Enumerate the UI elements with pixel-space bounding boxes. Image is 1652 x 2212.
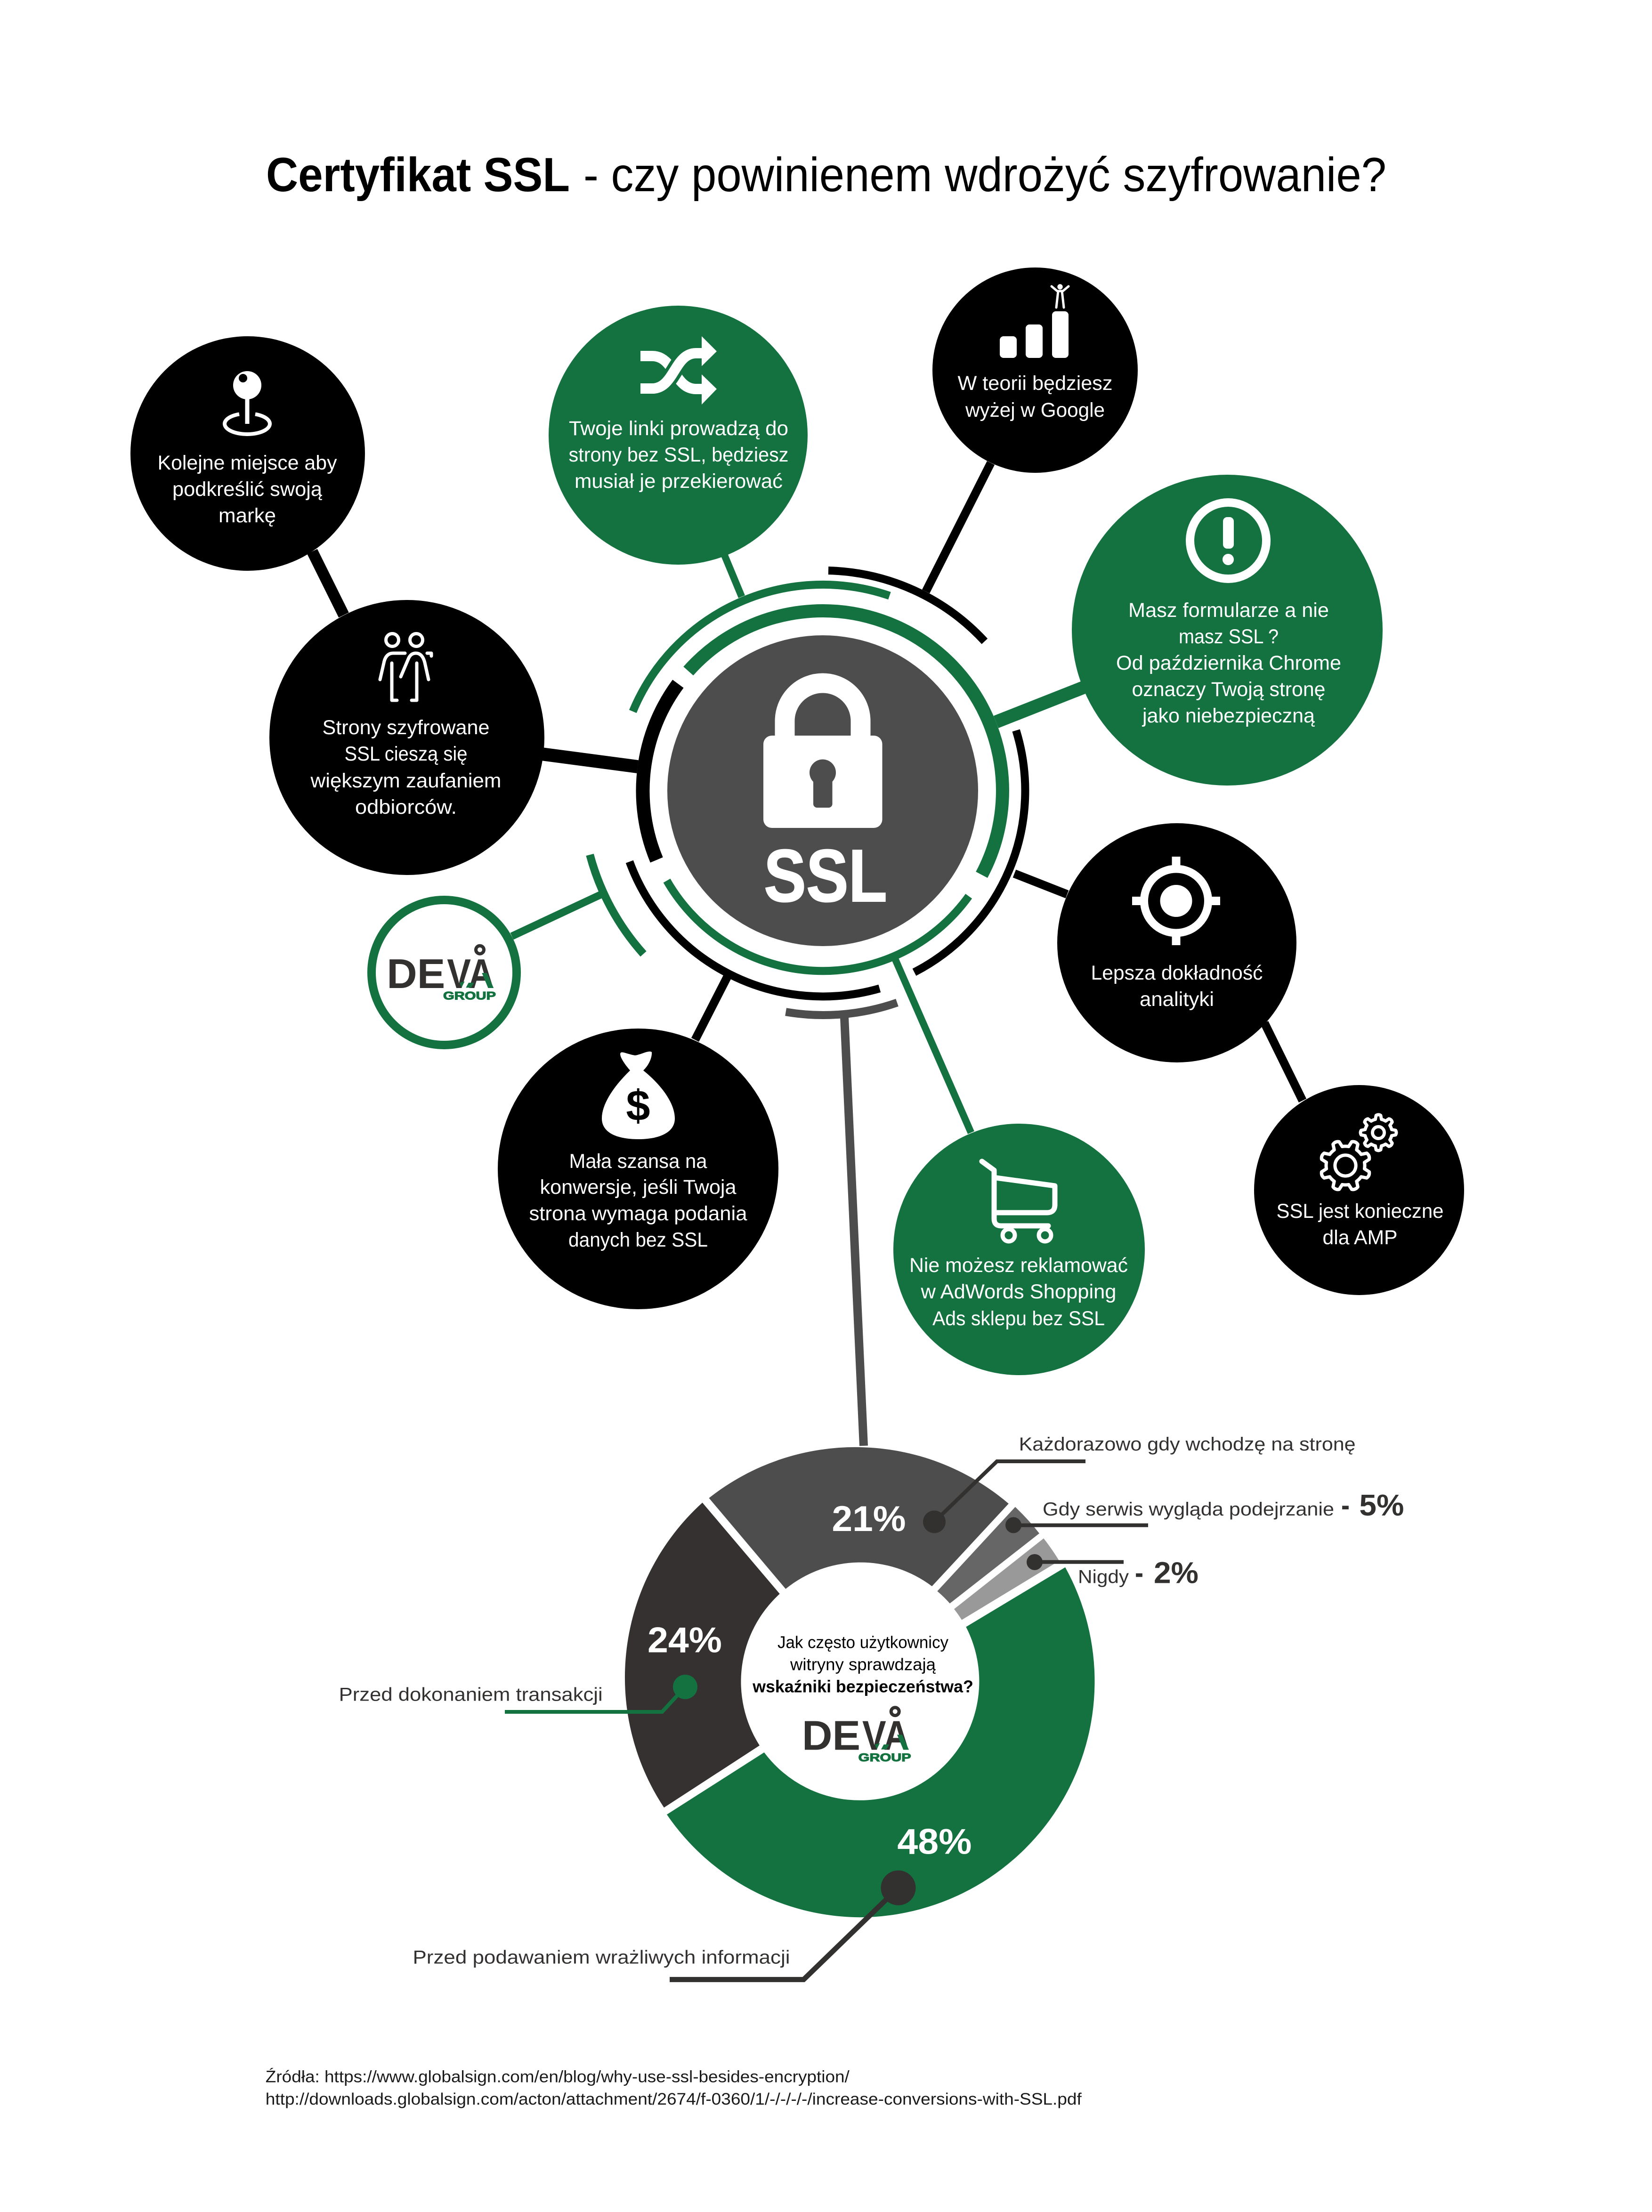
bubble text bbox=[1276, 1200, 1444, 1249]
bubble: forms warning bbox=[1072, 475, 1383, 786]
donut chart bbox=[625, 1447, 1094, 1917]
donut center question: witryny sprawdzają bbox=[790, 1655, 936, 1674]
bubble text: strona wymaga podania bbox=[529, 1202, 747, 1225]
logo: DEVA Group: GROUP bbox=[443, 989, 496, 1002]
percent labels bbox=[648, 1499, 972, 1862]
bubble text: Ads sklepu bez SSL bbox=[932, 1307, 1105, 1330]
central disc with lock bbox=[667, 635, 978, 946]
icon: money bag: $ bbox=[626, 1082, 650, 1130]
logo: DEVA Group: VA bbox=[447, 950, 494, 997]
logo: DEVA Group center: VA bbox=[862, 1712, 909, 1758]
callout: nigdy 2%: Nigdy bbox=[1078, 1567, 1129, 1588]
bubble text: SSL jest konieczne bbox=[1276, 1200, 1444, 1223]
logo: DEVA Group center: GROUP bbox=[858, 1751, 911, 1764]
icon: shuffle arrows bbox=[640, 336, 717, 405]
callout: gdy serwis 5% bbox=[1005, 1488, 1404, 1533]
callout: gdy serwis 5%: Gdy serwis wygląda podejrzanie bbox=[1043, 1499, 1334, 1520]
bubble: Google ranking bbox=[932, 267, 1138, 473]
callout: nigdy 2%: - bbox=[1135, 1556, 1143, 1590]
icon: money bag bbox=[602, 1052, 675, 1139]
logo: DEVA Group center bbox=[802, 1708, 911, 1764]
icon: map pin bbox=[225, 371, 270, 434]
bubble text: Lepsza dokładność bbox=[1091, 962, 1263, 984]
bubble text: Masz formularze a nie bbox=[1128, 599, 1329, 622]
callout: każdorazowo bbox=[923, 1434, 1356, 1533]
central rings bbox=[590, 571, 1025, 1015]
callout: nigdy 2% bbox=[1027, 1554, 1199, 1590]
callout: przed podawaniem informacji bbox=[413, 1871, 915, 1979]
bubble text bbox=[310, 716, 501, 818]
callout: przed dokonaniem transakcji bbox=[339, 1675, 697, 1712]
donut center question: wskaźniki bezpieczeństwa? bbox=[752, 1677, 973, 1696]
callout: gdy serwis 5%: - bbox=[1341, 1488, 1350, 1522]
percent labels: 48% bbox=[897, 1822, 972, 1862]
bubble text: Kolejne miejsce aby bbox=[157, 452, 337, 474]
logo: DEVA Group center: DE bbox=[802, 1712, 860, 1758]
bubble text: Twoje linki prowadzą do bbox=[569, 417, 788, 440]
bubble: conversion bbox=[498, 1029, 778, 1309]
bubble text: odbiorców. bbox=[355, 796, 457, 818]
callout: przed podawaniem informacji: Przed podawaniem wrażliwych informacji bbox=[413, 1947, 790, 1968]
bubble: AMP bbox=[1254, 1085, 1464, 1295]
bubble text: danych bez SSL bbox=[568, 1229, 708, 1251]
bubble: trust bbox=[269, 600, 544, 875]
bubble text bbox=[909, 1254, 1128, 1330]
bubble text: podkreślić swoją bbox=[172, 478, 322, 501]
title: - czy powinienem wdrożyć szyfrowanie? bbox=[583, 148, 1386, 202]
callout: każdorazowo: Każdorazowo gdy wchodzę na stronę bbox=[1019, 1434, 1356, 1455]
callout: gdy serwis 5%: 5% bbox=[1359, 1488, 1404, 1522]
title: Certyfikat SSL bbox=[266, 148, 570, 202]
sources: Źródła: https://www.globalsign.com/en/blog/why-use-ssl-besides-encryption/ bbox=[266, 2068, 850, 2086]
segment: 24% bbox=[625, 1503, 780, 1807]
bubble: links redirect bbox=[549, 306, 808, 565]
bubble text: Mała szansa na bbox=[569, 1150, 707, 1173]
icon: shopping cart bbox=[982, 1161, 1055, 1241]
bubble text: analityki bbox=[1140, 988, 1214, 1011]
bubble text: oznaczy Twoją stronę bbox=[1132, 678, 1325, 701]
bubble text: strony bez SSL, będziesz bbox=[569, 444, 788, 466]
title bbox=[266, 148, 1386, 202]
bubble text bbox=[157, 452, 337, 527]
bubble text: markę bbox=[219, 504, 276, 527]
donut center question bbox=[752, 1632, 973, 1696]
icon: gears bbox=[1319, 1115, 1396, 1192]
segment: 2% bbox=[954, 1539, 1059, 1620]
bubble text: SSL cieszą się bbox=[345, 743, 467, 765]
segment: 5% bbox=[937, 1507, 1039, 1604]
bubble: DEVA logo bbox=[372, 900, 517, 1045]
sources: http://downloads.globalsign.com/acton/attachment/2674/f-0360/1/-/-/-/-/increase-conversions-with-SSL.pdf bbox=[266, 2090, 1082, 2108]
bubble: shopping ads bbox=[893, 1124, 1145, 1375]
bubble text: musiał je przekierować bbox=[575, 470, 783, 493]
bubble text bbox=[1091, 962, 1263, 1011]
segment: 21% bbox=[709, 1447, 1009, 1589]
bubble text bbox=[569, 417, 788, 493]
bubble text: Strony szyfrowane bbox=[322, 716, 490, 739]
icon: bars with person bbox=[1000, 284, 1069, 358]
bubble text: masz SSL ? bbox=[1179, 625, 1279, 648]
sources bbox=[266, 2068, 1082, 2108]
bubble text: W teorii będziesz bbox=[958, 372, 1112, 395]
bubble text bbox=[1116, 599, 1341, 727]
bubble text: Nie możesz reklamować bbox=[909, 1254, 1128, 1277]
bubble text: konwersje, jeśli Twoja bbox=[540, 1176, 737, 1199]
bubble text: większym zaufaniem bbox=[310, 770, 501, 792]
bubble text: jako niebezpieczną bbox=[1142, 705, 1315, 727]
bubble text bbox=[529, 1150, 747, 1251]
segment: 48% bbox=[667, 1567, 1094, 1917]
bubble text: Od października Chrome bbox=[1116, 652, 1341, 674]
logo: DEVA Group: DE bbox=[387, 950, 445, 997]
callout: przed dokonaniem transakcji: Przed dokonaniem transakcji bbox=[339, 1685, 603, 1705]
bubble text: w AdWords Shopping bbox=[920, 1280, 1116, 1303]
bubble text: wyżej w Google bbox=[965, 399, 1105, 421]
icon: padlock bbox=[763, 683, 883, 828]
percent labels: 21% bbox=[832, 1499, 906, 1539]
percent labels: 24% bbox=[648, 1621, 722, 1661]
central label: SSL bbox=[764, 835, 887, 917]
callout: nigdy 2%: 2% bbox=[1154, 1556, 1199, 1590]
bubble: brand placement bbox=[130, 336, 365, 571]
logo: DEVA Group bbox=[387, 946, 496, 1002]
donut center question: Jak często użytkownicy bbox=[777, 1632, 948, 1652]
bubble text bbox=[958, 372, 1112, 421]
icon: two people bbox=[380, 634, 431, 700]
bubble: analytics bbox=[1057, 823, 1296, 1062]
connector lines bbox=[312, 463, 1303, 1446]
icon: exclamation mark bbox=[1190, 502, 1266, 579]
icon: target bbox=[1132, 857, 1220, 945]
bubble text: dla AMP bbox=[1322, 1226, 1398, 1249]
